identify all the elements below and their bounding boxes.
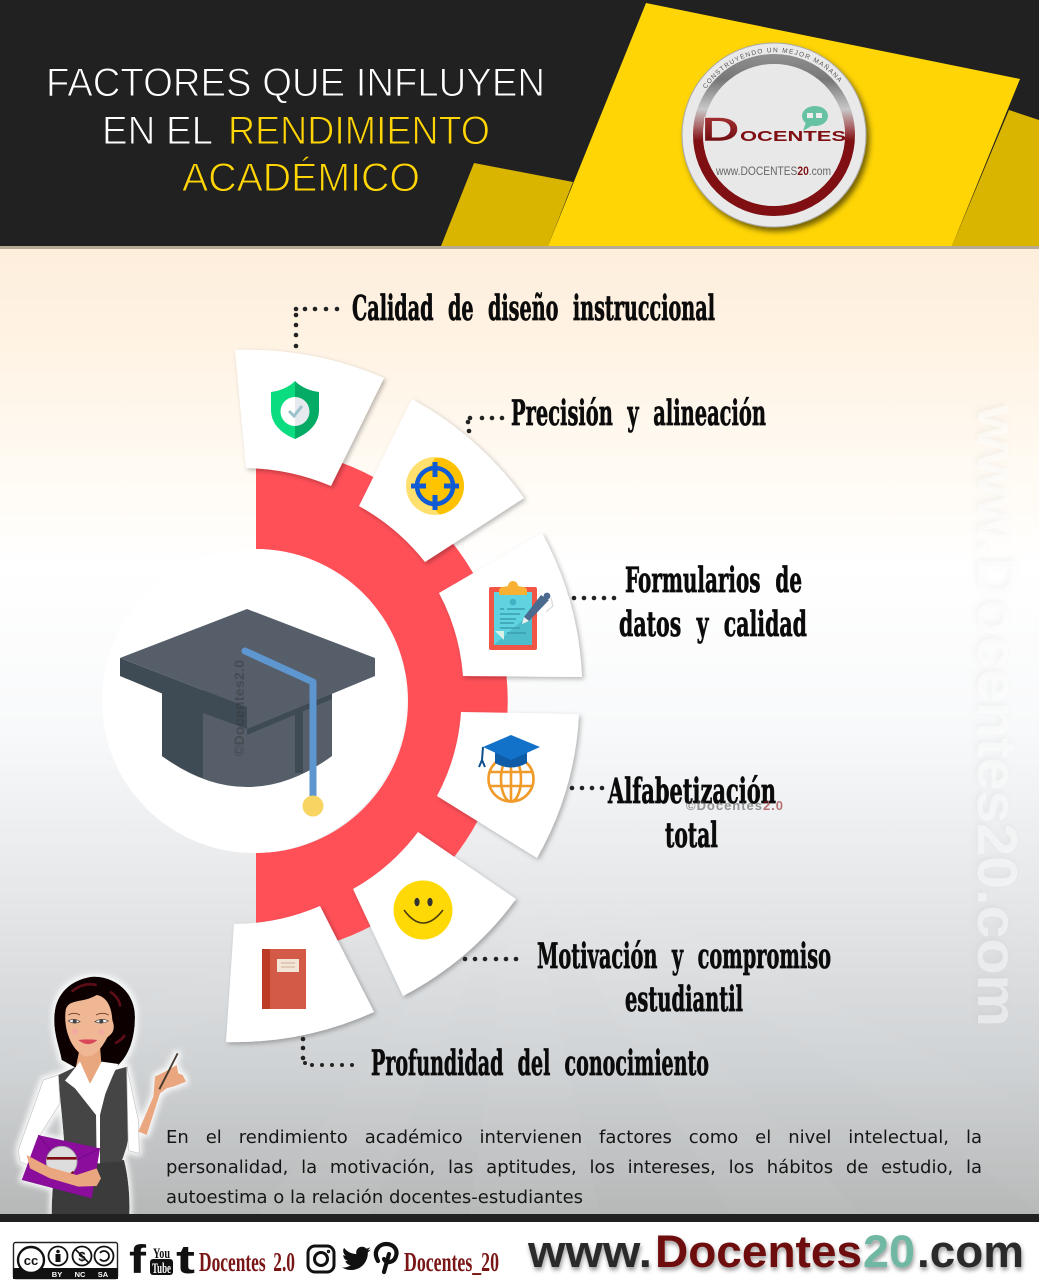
website address: Docentes <box>655 1226 862 1277</box>
speech bubble <box>802 106 828 131</box>
icon: globe with cap <box>479 735 540 802</box>
website address: .com <box>917 1226 1024 1277</box>
connector: dots to Profundidad <box>301 1037 354 1067</box>
icon: tumblr: t <box>176 1238 195 1282</box>
badge: Creative Commons BY NC SA: SA <box>98 1270 109 1279</box>
pointer stick <box>159 1053 178 1089</box>
badge: Creative Commons BY NC SA <box>13 1242 118 1279</box>
text block: description paragraph: personalidad, la motivación, las aptitudes, los intereses, los hábitos de estudio, la <box>166 1157 982 1178</box>
label: Precisión y alineación: Precisión y alineación <box>511 393 766 434</box>
page background <box>0 249 1039 1214</box>
badge: Creative Commons BY NC SA: NC <box>75 1270 86 1279</box>
logo: Docentes 2.0 badge: www.DOCENTES20.com <box>715 164 831 178</box>
dark yellow shape left <box>441 163 573 246</box>
icon: twitter <box>342 1247 371 1270</box>
panel: card 5 Motivación <box>353 832 516 996</box>
website address: 20 <box>863 1226 915 1277</box>
left sleeve <box>18 1075 60 1165</box>
connector: dots to Formularios <box>572 596 616 600</box>
text block: description paragraph: autoestima o la relación docentes-estudiantes <box>166 1187 583 1208</box>
face <box>65 995 114 1057</box>
panel: card 3 Formularios <box>439 533 582 677</box>
logo: Docentes 2.0 badge: OCENTES <box>740 128 846 145</box>
right forearm and hand <box>138 1065 186 1135</box>
logo: Docentes 2.0 badge: D <box>701 111 740 149</box>
white hub circle <box>102 549 406 853</box>
faint watermark on cap: ©Docentes2.0 <box>231 660 247 756</box>
panel: card 2 Precisión <box>359 399 524 562</box>
label: Motivación y compromiso estudiantil <box>537 936 831 1020</box>
title: ACADÉMICO <box>182 155 420 200</box>
label: Alfabetización total <box>607 771 776 856</box>
left forearm and hand <box>27 1155 101 1187</box>
logo: Docentes 2.0 badge <box>680 42 874 236</box>
purple folder <box>22 1135 100 1198</box>
icon: youtube <box>150 1246 173 1277</box>
skirt <box>52 1160 129 1215</box>
icon: pinterest <box>376 1244 397 1272</box>
label: Formularios de datos y calidad: Formularios de <box>625 560 802 601</box>
icon: instagram <box>308 1246 334 1272</box>
icon: green shield <box>271 381 319 439</box>
folder badge <box>46 1146 77 1177</box>
website address <box>527 1226 1024 1277</box>
label: Alfabetización total: total <box>665 815 718 856</box>
label: Calidad de diseño instruccional: Calidad de diseño instruccional <box>352 288 715 329</box>
label: Formularios de datos y calidad: datos y calidad <box>619 604 807 645</box>
central diagram <box>102 447 508 955</box>
panel: card 6 Profundidad <box>226 906 374 1042</box>
vertical watermark: www.Docentes20.com <box>966 404 1029 1027</box>
neck <box>76 1047 102 1083</box>
red half ring <box>256 447 508 955</box>
label: Alfabetización total: Alfabetización <box>607 771 776 812</box>
text block: description paragraph: En el rendimiento académico intervienen factores como el nivel intelectual, la <box>166 1127 982 1148</box>
icon: youtube: Tube <box>152 1261 171 1277</box>
label: Formularios de datos y calidad <box>619 560 807 645</box>
connector: dots to Precisión <box>466 416 504 433</box>
small watermark: ©Docentes2.0 <box>686 798 783 813</box>
title <box>46 61 545 200</box>
badge: Creative Commons BY NC SA: cc <box>24 1253 38 1268</box>
icon: youtube: You <box>153 1246 170 1262</box>
panel: card 4 Alfabetización <box>437 712 579 858</box>
footer <box>0 1214 1039 1286</box>
label: Docentes 2.0: Docentes 2.0 <box>199 1247 295 1277</box>
logo: Docentes 2.0 badge: CONSTRUYENDO UN MEJOR MAÑANA <box>703 48 842 88</box>
main yellow shape <box>548 3 1020 246</box>
connector: dots to Calidad <box>294 307 339 348</box>
hair <box>54 977 135 1068</box>
panel: card 1 Calidad <box>235 350 384 486</box>
icon: smiley <box>394 880 452 940</box>
website address: www. <box>527 1226 652 1277</box>
vest <box>58 1067 131 1165</box>
label: Motivación y compromiso estudiantil: estudiantil <box>625 979 743 1020</box>
dark yellow shape right <box>952 110 1039 246</box>
badge: Creative Commons BY NC SA: BY <box>52 1270 62 1279</box>
icon: facebook: f <box>129 1238 147 1282</box>
connector: dots to Alfabetización <box>570 786 604 790</box>
icon: red book <box>262 949 306 1009</box>
label: Profundidad del conocimiento: Profundidad del conocimiento <box>371 1043 709 1084</box>
title: RENDIMIENTO <box>228 109 490 153</box>
connector: dots to Motivación <box>463 957 518 961</box>
text block: description paragraph <box>166 1127 982 1208</box>
icon: clipboard and pen <box>489 581 553 650</box>
icon: graduation cap <box>120 609 375 816</box>
icon: target crosshair <box>406 457 464 515</box>
label: Docentes_20: Docentes_20 <box>404 1247 499 1277</box>
right sleeve <box>127 1067 139 1153</box>
background light rays <box>0 850 1039 1214</box>
header band <box>0 0 1039 249</box>
title: FACTORES QUE INFLUYEN <box>46 61 545 105</box>
badge: Creative Commons BY NC SA: $ <box>78 1249 86 1264</box>
illustration: teacher with folder <box>18 977 186 1215</box>
title: EN EL <box>102 109 213 153</box>
shirt <box>65 1062 118 1163</box>
